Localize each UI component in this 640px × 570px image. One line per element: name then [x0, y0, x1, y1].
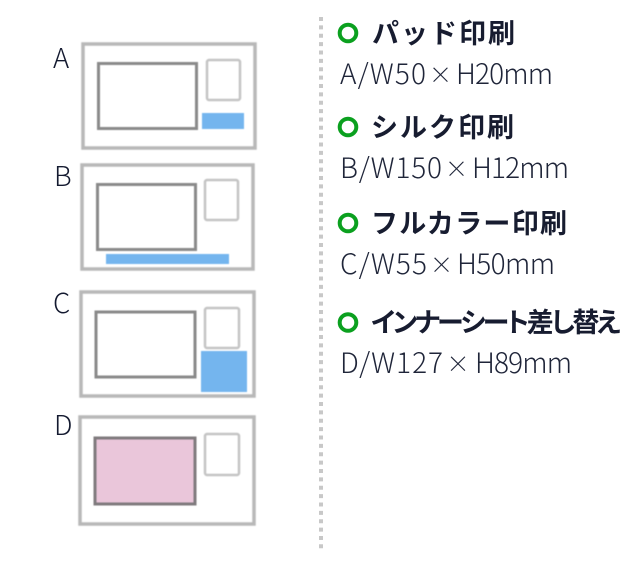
spec: insert sheet: D/W127: [340, 342, 443, 382]
diagram B: silk print area: B: [54, 154, 72, 194]
diagram C: full colour print area: C: [53, 281, 70, 321]
diagram D: insert sheet area: [54, 403, 254, 524]
diagram A: pad print area: A: [53, 36, 69, 76]
diagram C: full colour print area: [53, 281, 254, 396]
spec: pad print: H20mm: [456, 53, 553, 93]
diagram A: pad print area: [53, 36, 255, 148]
spec: pad print: ×: [429, 56, 452, 90]
spec: silk print: ×: [445, 150, 468, 184]
spec: full colour print: H50mm: [457, 243, 555, 283]
spec: full colour print: C/W55: [340, 243, 427, 283]
dotted divider: [319, 17, 323, 549]
spec: silk print: シルク印刷: [371, 106, 514, 145]
spec: pad print: A/W50: [340, 53, 426, 93]
spec: full colour print: ×: [430, 246, 453, 280]
spec: full colour print: [340, 202, 567, 283]
spec: silk print: H12mm: [472, 147, 569, 187]
spec: silk print: B/W150: [340, 147, 442, 187]
diagram B: silk print area: [54, 154, 253, 269]
spec: insert sheet: インナーシート差し替え: [371, 301, 621, 340]
diagram D: insert sheet area: D: [54, 403, 72, 443]
spec: pad print: パッド印刷: [372, 12, 515, 51]
spec: silk print: [340, 106, 569, 187]
spec: insert sheet: H89mm: [475, 342, 572, 382]
spec: insert sheet: [340, 301, 621, 382]
spec: full colour print: フルカラー印刷: [371, 202, 567, 241]
spec: pad print: [340, 12, 553, 93]
spec: insert sheet: ×: [446, 345, 470, 379]
